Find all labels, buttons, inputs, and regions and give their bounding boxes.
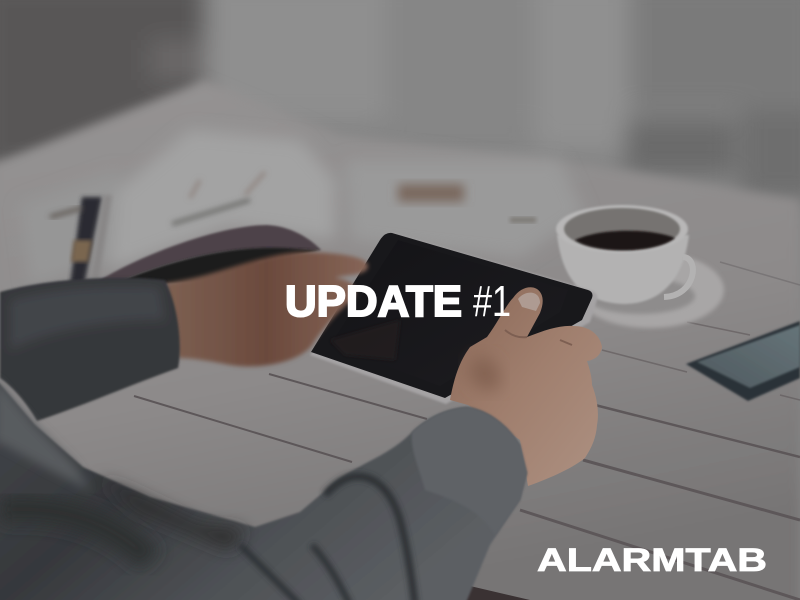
left forearm sleeve: [0, 278, 180, 421]
tablet held in hands: [310, 233, 597, 404]
left hand: [165, 252, 400, 366]
right hand with pointing thumb: [450, 287, 602, 486]
logo: ALARMTAB wordmark: ALARMTAB: [537, 542, 767, 578]
coffee cup on saucer: [556, 205, 724, 328]
foreground sleeve: [0, 378, 527, 600]
title: UPDATE #1: UPDATE: [285, 277, 462, 326]
smartphone on table: [686, 321, 800, 401]
title: UPDATE #1: #1: [473, 277, 511, 326]
open magazine on table: [20, 130, 585, 285]
dark floor below table edge: [462, 586, 530, 600]
